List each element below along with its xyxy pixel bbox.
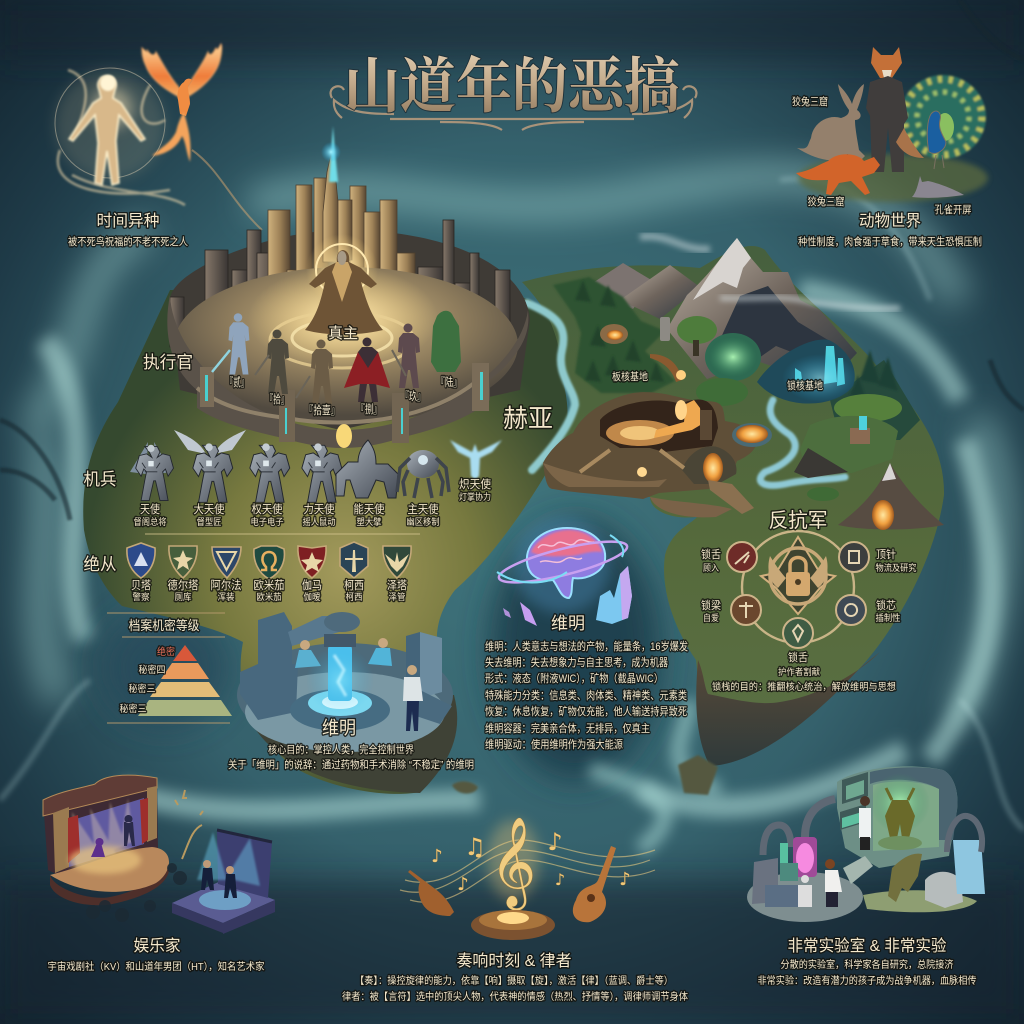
tier: top secret [173, 645, 197, 661]
panel: archive secrecy pyramid: 秘密三 [128, 683, 156, 695]
labels: animal world: 狡兔三窟 [808, 195, 844, 208]
panel: archive secrecy pyramid [107, 613, 232, 723]
labels: executives: 『拾壹』 [304, 403, 340, 417]
text block: vitality definition: 维明驱动：使用维明作为强大能源 [485, 737, 623, 751]
labels: animal world: 孔雀开屏 [934, 203, 972, 216]
labels: mecha units: 主天使 [408, 502, 439, 516]
illustration: music clef and instruments: ♪ [457, 874, 469, 895]
labels: rebel nodes: 反抗军 [768, 509, 828, 532]
small islets [452, 755, 718, 795]
tier: level three lower [138, 700, 232, 716]
illustration: music clef and instruments: 𝄞 [490, 817, 536, 911]
map: rivers [527, 303, 845, 485]
labels: music: 律者：被【言符】选中的顶尖人物，代表神的情感（热烈、抒情等），调律师调节身体 [342, 990, 688, 1003]
text block: vitality definition: 维明容器：完美亲合体，无排异，仅真主 [485, 721, 650, 735]
title: 山道年的恶搞 [344, 39, 680, 125]
tier: level three upper [150, 682, 220, 697]
labels: executives [143, 324, 553, 433]
labels: vitality lab [228, 718, 474, 771]
mech: virtue quadruped [336, 440, 398, 498]
row: mecha units [130, 430, 502, 502]
labels: subordinates: 警察 [132, 591, 150, 602]
labels: subordinates: 柯西 [346, 591, 362, 602]
shield: kappa [340, 542, 368, 578]
labels: executives: 『陆』 [436, 375, 462, 389]
labels: subordinates: 欧米茄 [256, 591, 282, 602]
labels: executives: 『玖』 [401, 390, 425, 403]
labels: subordinates: 柯西 [344, 579, 364, 592]
labels: subordinates: 欧米茄 [254, 578, 284, 592]
labels: subordinates: 泽塔 [387, 579, 407, 592]
illustration: music clef and instruments: ♪ [619, 869, 631, 890]
labels: mecha units [84, 470, 491, 527]
shield: alpha [212, 547, 241, 578]
heading: time variant: 被不死鸟祝福的不老不死之人 [68, 235, 188, 248]
labels: rebel nodes: 锁梁 [701, 598, 721, 612]
labels: mecha units: 督阁总将 [134, 516, 166, 527]
map: teal crystal cavern [757, 340, 858, 404]
labels: mecha units: 力天使 [304, 502, 335, 516]
node: left bottom [731, 595, 761, 625]
labels: mecha units: 权天使 [252, 502, 283, 516]
ring: links [742, 531, 854, 643]
illustration: animal world [796, 47, 988, 202]
labels: mecha units: 灯掌协力 [459, 491, 491, 502]
labels: mecha units: 电子电子 [250, 516, 284, 527]
illustration: theatre and idol stage [43, 775, 275, 934]
node: bottom [783, 618, 813, 648]
cliff under rebel land [696, 652, 880, 766]
text block: vitality definition: 维明 [551, 614, 585, 633]
text block: vitality definition [485, 614, 688, 751]
labels: mecha units: 摇人鼠动 [302, 516, 336, 527]
labels: subordinates: 贝塔 [131, 579, 151, 592]
illustration: music clef and instruments: ♪ [431, 846, 443, 867]
labels: rebel nodes: 锁舌 [701, 547, 721, 561]
labels: rebel nodes: 自爱 [703, 612, 719, 623]
text block: vitality definition: 形式：液态（附液WIC），矿物（截晶WIC） [485, 671, 663, 685]
text block: vitality definition: 失去维明：失去想象力与自主思考，成为机器 [485, 655, 668, 669]
shield: delta [169, 546, 197, 578]
labels: mecha units: 大天使 [194, 502, 225, 516]
labels: executives: 『捌』 [356, 402, 382, 416]
illustration: music clef and instruments [400, 817, 655, 940]
labels: music: 【奏】：操控旋律的能力，依靠【响】摄取【旋】，激活【律】（蓝调、爵士等） [355, 974, 673, 987]
map: east continent 反抗军 [522, 246, 944, 766]
labels: rebel nodes: 顶针 [876, 547, 896, 561]
shield: gamma [298, 546, 326, 578]
mech: archangel [174, 430, 246, 502]
labels: east bases: 锁核基地 [787, 379, 823, 392]
illustration: music clef and instruments: ♪ [547, 828, 563, 856]
labels: rebel nodes: 锁栈的目的：推翻核心统治，解放维明与思想 [712, 680, 896, 693]
labels: rebel nodes: 物流及研究 [876, 562, 916, 573]
labels: east bases [612, 370, 823, 392]
shield: zeta [383, 546, 411, 578]
labels: mecha units: 机兵 [84, 470, 116, 489]
labels: subordinates: 厕库 [174, 591, 192, 602]
map: tower on hill and cave [794, 416, 944, 530]
labels: mecha units: 能天使 [354, 502, 385, 516]
figure: true lord [305, 250, 383, 334]
labels: unusual laboratory [758, 937, 976, 987]
illustration: time variant human and phoenix [55, 44, 262, 230]
labels: executives: 真主 [328, 324, 358, 342]
labels: vitality lab: 维明 [322, 718, 356, 738]
labels: executives: 赫亚 [503, 405, 553, 433]
map: west continent 赫亚 [83, 290, 568, 794]
labels: executives: 执行官 [143, 353, 193, 372]
panel: archive secrecy pyramid: 绝密 [157, 646, 175, 658]
heading: archive levels: 档案机密等级 [128, 618, 200, 633]
node: right top [839, 542, 869, 572]
illustration: unusual laboratory [747, 766, 985, 922]
mech: angel [130, 442, 174, 501]
map: underground base [543, 392, 772, 517]
labels: executives: 『贰』 [226, 375, 248, 389]
heading: time variant: 时间异种 [96, 212, 160, 230]
illustration: music clef and instruments: ♫ [464, 833, 486, 861]
node: left top [727, 542, 757, 572]
labels: rebel nodes: 插制性 [876, 612, 900, 623]
labels: subordinates: 阿尔法 [210, 578, 242, 592]
text block: vitality definition: 特殊能力分类：信息类、肉体类、精神类、元素类 [485, 688, 687, 702]
labels: mecha units: 幽区移制 [406, 516, 440, 527]
labels: rebel nodes: 护作者割献 [778, 666, 820, 677]
tier: level four [161, 663, 209, 679]
icon: brain with crystals [496, 517, 632, 626]
labels: subordinates: 德尔塔 [168, 578, 199, 592]
map: mountains [582, 236, 900, 385]
labels: subordinates [84, 555, 407, 602]
labels: executives: 『拾』 [266, 392, 288, 406]
mech: seraph [450, 440, 502, 480]
labels: unusual laboratory: 非常实验室 & 非常实验 [788, 937, 946, 955]
labels: entertainers: 宇宙戏剧社（KV）和山道年男团（HT），知名艺术家 [48, 960, 264, 973]
labels: subordinates: 泽管 [388, 591, 406, 602]
text block: vitality definition: 维明：人类意志与想法的产物，能量条，16岁爆发 [485, 639, 688, 653]
labels: rebel nodes: 锁芯 [876, 598, 896, 612]
text block: vitality definition: 恢复：休息恢复，矿物仅充能，他人输送持异致死 [485, 704, 687, 718]
shield: beta [127, 543, 155, 578]
panel: archive secrecy pyramid: 秘密四 [138, 664, 166, 676]
labels: mecha units: 炽天使 [459, 477, 491, 491]
panel: archive secrecy pyramid: 秘密三 [120, 703, 146, 715]
labels: mecha units: 天使 [140, 502, 160, 516]
labels: mecha units: 塑大擘 [356, 516, 382, 527]
labels: subordinates: 伽马 [302, 578, 322, 592]
labels: animal world [792, 95, 982, 248]
labels: rebel nodes: 锁舌 [788, 650, 808, 664]
figures: six executives [212, 311, 461, 404]
heading: time variant [68, 212, 188, 248]
labels: animal world: 动物世界 [859, 212, 921, 230]
labels: vitality lab: 关于「维明」的说辞：通过药物和手术消除 “不稳定” 的维明 [228, 758, 474, 771]
labels: unusual laboratory: 分散的实验室，科学家各自研究，总院接济 [780, 958, 954, 971]
labels: mecha units: 督型匠 [196, 516, 222, 527]
map: forests and bases [553, 277, 920, 440]
illustration: music clef and instruments: ♪ [555, 870, 565, 889]
labels: rebel nodes: 顾入 [703, 563, 719, 573]
city: floating fortress of the executives [167, 126, 530, 448]
labels: animal world: 种性制度，肉食强于草食，带来天生恐惧压制 [798, 235, 982, 248]
row: subordinate shields [127, 542, 411, 579]
labels: unusual laboratory: 非常实验：改造有潜力的孩子成为战争机器，血脉相传 [758, 974, 976, 987]
labels: subordinates: 绝从 [84, 555, 116, 574]
labels: subordinates: 伽暧 [304, 591, 320, 602]
shield: omega [254, 546, 284, 579]
labels: entertainers: 娱乐家 [134, 937, 180, 955]
labels: entertainers [48, 937, 264, 973]
labels: vitality lab: 核心目的：掌控人类，完全控制世界 [268, 743, 414, 756]
labels: east bases: 板核基地 [612, 370, 648, 383]
node: right bottom [836, 595, 866, 625]
labels: rebel nodes [701, 509, 916, 693]
labels: animal world: 狡兔三窟 [792, 95, 828, 108]
panel: rebel emblem network [727, 531, 869, 648]
mech: dominion spider [397, 450, 449, 498]
labels: music: 奏响时刻 & 律者 [456, 952, 572, 970]
illustration: vitality extraction lab [237, 612, 457, 793]
emblem: padlock with wings [761, 537, 835, 614]
labels: music [342, 952, 688, 1003]
labels: subordinates: 浑装 [218, 591, 234, 602]
